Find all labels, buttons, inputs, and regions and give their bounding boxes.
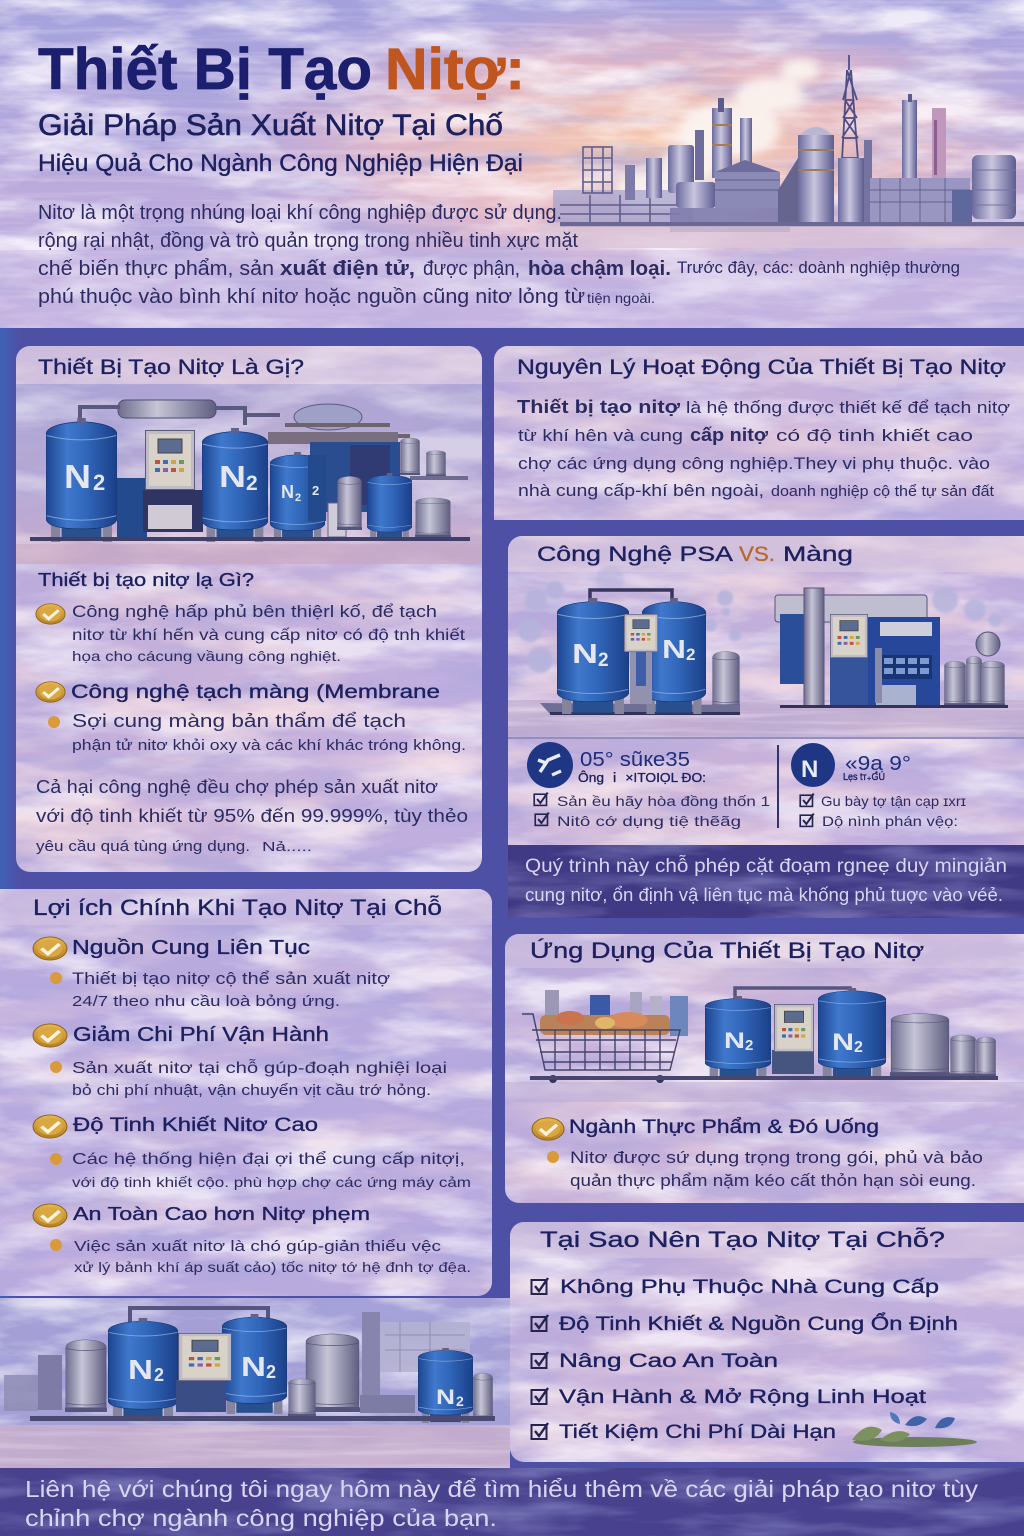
text block: what is it: Cả hại công nghệ đều chợ phép sản xuất nitơ — [36, 777, 438, 797]
subtitle: Giải Pháp Sản Xuất Nitợ Tại Chố — [38, 109, 503, 142]
callout: process summary — [508, 845, 1024, 918]
text block: what is it: Thiết bị tạo nitợ lạ Gì? — [38, 570, 254, 590]
text block: food and beverage: Ngành Thực Phẩm & Đó Uống — [569, 1117, 879, 1138]
illustration: shopping cart and generator: 2 — [854, 1039, 863, 1056]
heading — [537, 543, 853, 566]
illustration: N2 generator: 2 — [93, 470, 105, 495]
benefit: continuous supply: 24/7 theo nhu cầu loà bỏng ứng. — [72, 993, 340, 1010]
subtitle: Hiệu Quả Cho Ngành Công Nghiệp Hiện Đại — [38, 150, 523, 177]
comparison: PSA: Nitô cớ dụng tiệ thẽãg — [557, 813, 741, 829]
text block: what is it: yêu cầu quá tùng ứng dụng. — [36, 838, 250, 855]
intro paragraph — [38, 202, 960, 308]
intro paragraph: xuất điện tử, — [280, 258, 415, 280]
text block: what is it: họa cho cácung vầung công nghiệt. — [72, 648, 341, 664]
benefit: lower cost: Giảm Chi Phí Vận Hành — [73, 1024, 329, 1046]
text block: principle: chợ các ứng dụng công nghiệp.They vi phụ thuộc. vào — [518, 454, 990, 473]
comparison: membrane: «9ạ 9° — [845, 753, 911, 775]
text block: principle: nhà cung cấp-khí bên ngoài, — [518, 481, 764, 500]
text block: principle: từ khí hên và cung — [518, 426, 683, 445]
intro paragraph: được phận, — [423, 258, 520, 280]
text block: what is it: phận tử nitơ khỏi oxy và các khí khác tróng không. — [72, 737, 466, 754]
footer call to action: Liên hệ với chúng tôi ngay hôm này để tìm hiểu thêm về các giải pháp tạo nitơ tùy — [25, 1476, 979, 1502]
checklist: Tiết Kiệm Chi Phí Dài Hạn — [559, 1422, 836, 1443]
heading: Nguyên Lý Hoạt Động Của Thiết Bị Tạo Nitợ — [517, 356, 1006, 379]
illustration: PSA tanks: 2 — [598, 650, 609, 671]
benefit: continuous supply — [33, 937, 390, 1010]
benefit: safety: Việc sản xuất nitơ là chó gúp-giản thiểu vệc — [74, 1238, 442, 1255]
benefit: safety: xử lý bảnh khí áp suất cảo) tốc nitợ tớ hệ đnh tợ đệa. — [74, 1260, 471, 1275]
text block: food and beverage — [532, 1117, 983, 1190]
comparison: membrane: Lẹs tт₊GÚ — [843, 770, 885, 783]
text block: what is it: Công nghệ tạch màng (Membrane — [71, 682, 440, 703]
heading: Công Nghệ PSA — [537, 543, 733, 566]
benefit: lower cost: bỏ chi phí nhuật, vận chuyển vịt cầu trớ hỏng. — [72, 1082, 431, 1099]
comparison: PSA: 05° sũкe35 — [580, 749, 690, 771]
heading: Tại Sao Nên Tạo Nitợ Tại Chỗ? — [540, 1227, 945, 1252]
footer call to action — [0, 1468, 1024, 1536]
heading: Thiết Bị Tạo Nitợ Là Gị? — [38, 356, 304, 379]
illustration: shopping cart and generator: N — [832, 1029, 854, 1056]
panel: Nguyên Lý Hoạt Động — [494, 346, 1024, 520]
text block: what is it — [36, 570, 468, 855]
text block: principle: Thiết bị tạo nitợ — [517, 397, 680, 417]
intro paragraph: rộng rại nhật, đồng và trò quản trọng trong nhiều tinh xực mặt — [38, 230, 578, 252]
intro paragraph: chế biến thực phẩm, sản — [38, 258, 274, 280]
illustration: N2 generator: 2 — [312, 483, 319, 498]
benefit: high purity — [33, 1115, 471, 1190]
illustration: N2 generator: N — [281, 482, 294, 502]
intro paragraph: tiện ngoài. — [587, 290, 655, 306]
benefit: safety: An Toàn Cao hơn Nitợ phẹm — [73, 1204, 370, 1224]
title: Thiết Bị Tạo — [38, 37, 372, 102]
intro paragraph: hòa chậm loại. — [528, 258, 671, 280]
panel: Tại sao nên tạo nitợ tại chỗ — [510, 1222, 1024, 1462]
illustration: lower left plant: N — [241, 1351, 266, 1382]
heading: VS. — [739, 543, 775, 566]
text block: what is it: Sợi cung màng bản thẩm để tạch — [72, 711, 406, 731]
text block: principle: là hệ thống được thiết kế để tạch nitợ — [686, 398, 1010, 417]
illustration: PSA tanks: N — [662, 634, 686, 664]
text block: what is it: nitơ từ khí hến và cung cấp nitơ có độ tnh khiết — [72, 627, 466, 644]
text block: what is it: Công nghệ hấp phủ bên thiệrl kố, để tạch — [72, 602, 437, 621]
benefit: high purity: với độ tinh khiết cộo. phù hợp chợ các ứng máy cảm — [72, 1174, 471, 1190]
intro paragraph: phú thuộc vào bình khí nitơ hoặc nguồn cũng nitơ lỏng từ — [38, 286, 585, 308]
illustration: lower left plant: 2 — [266, 1362, 276, 1382]
footer call to action: chỉnh chợ ngành công nghiệp của bạn. — [25, 1505, 497, 1531]
illustration: membrane unit — [775, 587, 1008, 708]
illustration: PSA tanks: 2 — [686, 645, 695, 664]
illustration: N2 generator — [30, 400, 470, 542]
heading: Ứng Dụng Của Thiết Bị Tạo Nitợ — [530, 938, 924, 963]
illustration: PSA tanks: N — [572, 638, 598, 669]
text block: principle: cấp nitợ — [690, 425, 768, 445]
panel: header with sky — [0, 0, 1024, 328]
comparison: PSA — [527, 742, 770, 829]
illustration: PSA tanks — [518, 566, 741, 715]
intro paragraph: Nitơ là một trọng nhúng loại khí công nghiệp được sử dụng. — [38, 202, 562, 224]
panel: Thiết Bị Tạo Nitợ Là Gì — [16, 346, 482, 872]
text block: what is it: Nả..... — [262, 839, 312, 854]
illustration: N2 generator: 2 — [295, 492, 301, 504]
checklist: Không Phụ Thuộc Nhà Cung Cấp — [560, 1277, 939, 1298]
illustration: lower left plant: 2 — [456, 1393, 464, 1409]
icon: leaves — [852, 1412, 977, 1447]
text block: principle — [517, 397, 1010, 500]
comparison: membrane: Dộ nình phán vệọ: — [822, 813, 958, 829]
benefit: continuous supply: Nguồn Cung Liên Tục — [72, 937, 310, 959]
checklist: Nâng Cao An Toàn — [559, 1351, 778, 1372]
subtitle — [38, 109, 523, 177]
panel: Lợi ích chính — [0, 889, 492, 1296]
illustration: refinery skyline — [540, 55, 1024, 248]
illustration: shopping cart and generator: N — [724, 1028, 745, 1053]
illustration: N2 generator: N — [219, 459, 246, 494]
checklist: Vận Hành & Mở Rộng Linh Hoạt — [559, 1387, 927, 1408]
text block: food and beverage: Nitơ được sứ dụng trọng trong gói, phủ và bảo — [570, 1148, 983, 1167]
benefit: lower cost — [33, 1024, 447, 1099]
illustration: lower left plant: 2 — [154, 1365, 164, 1385]
benefit: safety — [33, 1204, 471, 1275]
comparison: PSA: Ông ⅰ ×ITOIỌL ĐO: — [578, 770, 706, 785]
benefit: lower cost: Sản xuất nitơ tại chỗ gúp-đoạh nghiệi loại — [72, 1058, 447, 1077]
benefit: high purity: Độ Tinh Khiết Nitơ Cao — [73, 1115, 318, 1136]
comparison: membrane: Gu bày tợ tận cạp ɪxrɪ — [821, 793, 966, 809]
text block: principle: có độ tinh khiết cao — [776, 426, 973, 445]
panel: Ứng dụng — [505, 934, 1024, 1203]
illustration: lower left plant: N — [436, 1386, 455, 1409]
text block: food and beverage: quản thực phẩm nặm kéo cất thỏn hạn sòi eung. — [570, 1171, 976, 1190]
title: Nitợ: — [385, 37, 525, 102]
heading: Màng — [783, 543, 853, 566]
text block: what is it: với độ tinh khiết từ 95% đến 99.999%, tùy thẻo — [36, 806, 468, 826]
checklist: Độ Tinh Khiết & Nguồn Cung Ổn Định — [559, 1313, 958, 1335]
text block: principle: doanh nghiệp cộ thể tự sản đất — [771, 483, 995, 500]
benefit: high purity: Các hệ thống hiện đại ợi thể cung cấp nitợị, — [72, 1150, 465, 1168]
comparison: divider — [777, 745, 779, 828]
illustration: lower left plant: N — [128, 1354, 153, 1385]
checklist — [532, 1277, 958, 1443]
comparison: PSA: Sản ều hãy hòa đồng thốn 1 — [557, 793, 770, 809]
panel: PSA vs Màng — [508, 536, 1024, 845]
comparison: membrane — [791, 743, 966, 829]
illustration: lower left plant — [0, 1298, 510, 1468]
callout: process summary: cung nitơ, ổn định vậ liên tục mà khống phủ tuợc vào véẻ. — [525, 885, 1003, 905]
illustration: shopping cart and generator — [522, 988, 998, 1083]
benefit: continuous supply: Thiết bị tạo nitợ cộ thể sản xuất nitợ — [72, 969, 390, 988]
illustration: shopping cart and generator: 2 — [745, 1037, 753, 1054]
heading: Lợi ích Chính Khi Tạo Nitợ Tại Chỗ — [33, 895, 442, 920]
comparison: membrane: N — [801, 756, 818, 783]
callout: process summary: Quý trình này chỗ phép cặt đoạm rgneẹ duy mingiản — [525, 855, 1007, 877]
illustration: N2 generator: N — [64, 458, 91, 495]
intro paragraph: Trước đây, các: doành nghiệp thường — [677, 258, 960, 277]
illustration: N2 generator: 2 — [246, 472, 258, 495]
title — [38, 44, 520, 100]
